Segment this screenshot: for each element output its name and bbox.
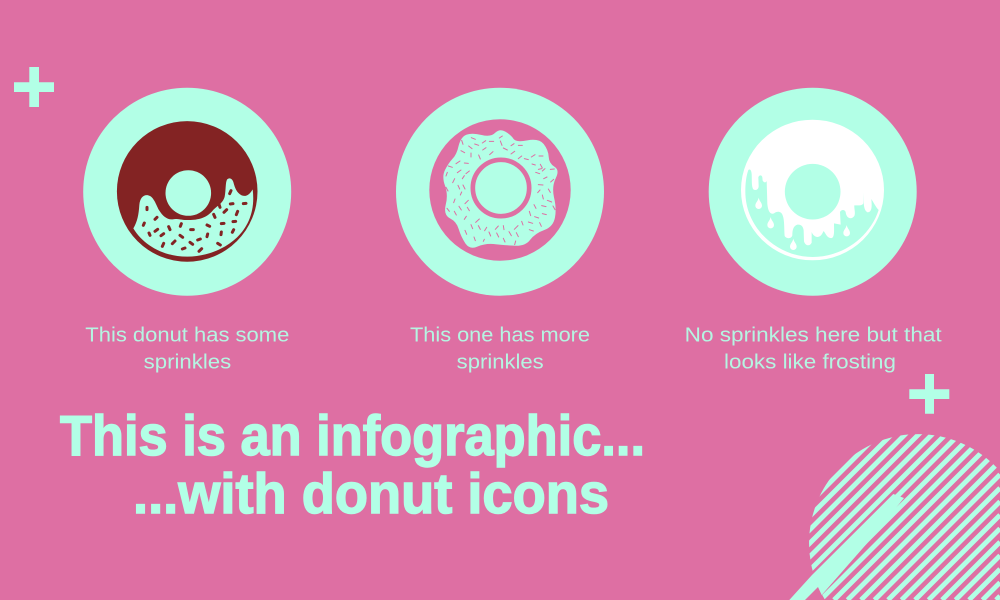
icon: plus top left xyxy=(14,67,54,107)
title xyxy=(60,404,645,526)
icon: donut with some sprinkles xyxy=(83,88,291,296)
caption: donut one: sprinkles xyxy=(144,351,231,373)
caption: donut three: No sprinkles here but that xyxy=(685,325,942,347)
icon: plus bottom right xyxy=(909,374,949,414)
caption: donut one: This donut has some xyxy=(85,325,289,347)
title: This is an infographic... xyxy=(60,404,645,468)
icon: donut with frosting xyxy=(709,88,917,296)
icon: donut with more sprinkles xyxy=(396,88,604,296)
caption: donut three xyxy=(685,325,942,373)
title: ...with donut icons xyxy=(133,462,609,526)
caption: donut two: This one has more xyxy=(410,325,590,347)
caption: donut one xyxy=(85,325,289,373)
caption: donut two: sprinkles xyxy=(457,351,544,373)
caption: donut three: looks like frosting xyxy=(724,351,896,373)
caption: donut two xyxy=(410,325,590,373)
hatched lollipop decoration xyxy=(789,434,1000,600)
